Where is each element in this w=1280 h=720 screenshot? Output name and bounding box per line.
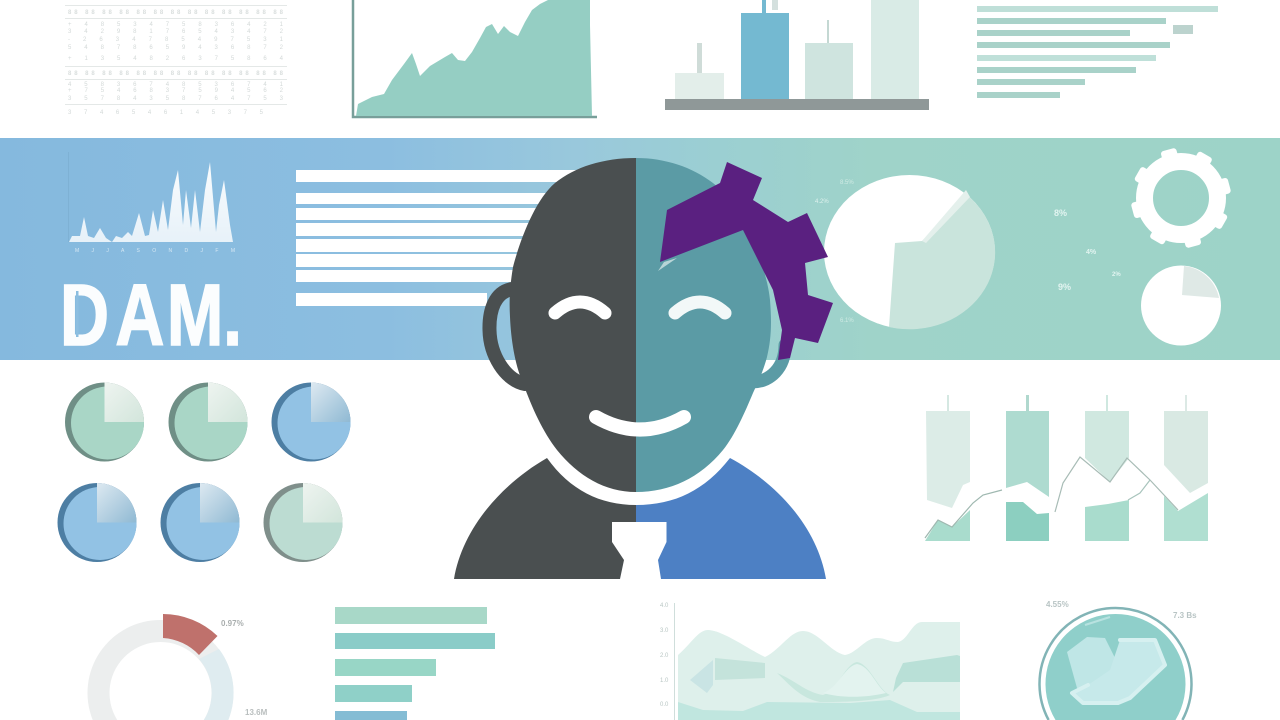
banner large pie chart	[815, 175, 995, 329]
banner small pie chart	[1141, 266, 1221, 346]
top-left data table: 4 5 8 3 6 7 4 8 5 3 6 7 4 1	[68, 82, 284, 88]
banner large pie chart: 4.2%	[815, 199, 829, 205]
top-left data table: + 4 8 5 3 4 7 5 8 3 6 4 2 1	[68, 22, 284, 28]
top-left data table	[65, 5, 287, 116]
globe chart	[1040, 600, 1197, 720]
top horizontal bars	[977, 6, 1218, 98]
pie 1	[65, 382, 144, 462]
banner small labels: 9%	[1058, 282, 1071, 292]
pie chart grid	[58, 382, 350, 562]
banner white stripes	[296, 170, 586, 306]
banner spike chart	[68, 152, 235, 254]
banner text: DAM.: DAM.	[60, 266, 242, 364]
person: head	[510, 158, 771, 492]
top-left data table: 3 7 4 6 5 4 6 1 4 5 3 7 5	[68, 110, 264, 116]
person: gear hair	[658, 162, 833, 360]
pie 2	[168, 382, 248, 462]
top-left data table: 88 88 88 88 88 88 88 88 88 88 88 88 88	[68, 10, 284, 16]
banner small labels: 4%	[1086, 249, 1097, 256]
top-left data table: 88 88 88 88 88 88 88 88 88 88 88 88 88	[68, 71, 284, 77]
banner small labels	[1054, 208, 1121, 292]
pie 5	[160, 483, 240, 562]
donut chart: 0.97%	[221, 619, 244, 628]
banner small labels: 8%	[1054, 208, 1067, 218]
stacked wave chart: 2.0	[660, 653, 669, 659]
top-left data table: - 2 6 3 4 7 8 5 4 9 7 5 3 1	[68, 37, 284, 43]
pie 4	[58, 483, 136, 562]
top-left data table: + 7 5 4 6 8 3 7 5 9 4 5 6 2	[68, 88, 284, 94]
stacked wave chart: 0.0	[660, 702, 669, 708]
top-left data table: 3 5 7 8 4 3 5 8 7 6 4 7 5 3	[68, 96, 284, 102]
globe chart: 7.3 Bs	[1173, 611, 1197, 620]
pie 3	[272, 382, 350, 462]
top-left data table: 3 4 2 9 8 1 7 6 5 4 3 4 7 2	[68, 29, 284, 35]
banner large pie chart: 6.1%	[840, 318, 854, 324]
donut chart: 13.6M	[245, 708, 268, 717]
pie 6	[264, 483, 342, 562]
person: eyes and smile	[555, 302, 725, 430]
banner gear icon	[1131, 148, 1231, 248]
stacked wave chart: 3.0	[660, 628, 669, 634]
central banner band	[0, 138, 1280, 360]
top-left data table: + 1 3 5 4 8 2 6 3 7 5 8 6 4	[68, 56, 284, 62]
person: shoulders	[454, 458, 826, 579]
banner large pie chart: 8.5%	[840, 180, 854, 186]
candlestick chart	[925, 395, 1208, 541]
globe chart: 4.55%	[1046, 600, 1069, 609]
banner spike chart: M J J A S O N D J F M	[75, 248, 235, 254]
stacked wave chart: 1.0	[660, 678, 669, 684]
donut chart	[88, 614, 268, 720]
stacked wave chart	[660, 603, 960, 720]
banner small labels: 2%	[1112, 272, 1121, 278]
top bar chart	[665, 0, 929, 110]
top area chart	[353, 0, 597, 117]
bottom horizontal bars	[335, 607, 495, 720]
person: ears	[489, 289, 785, 384]
stacked wave chart: 4.0	[660, 603, 669, 609]
top-left data table: 5 4 8 7 8 6 5 9 4 3 6 8 7 2	[68, 45, 284, 51]
